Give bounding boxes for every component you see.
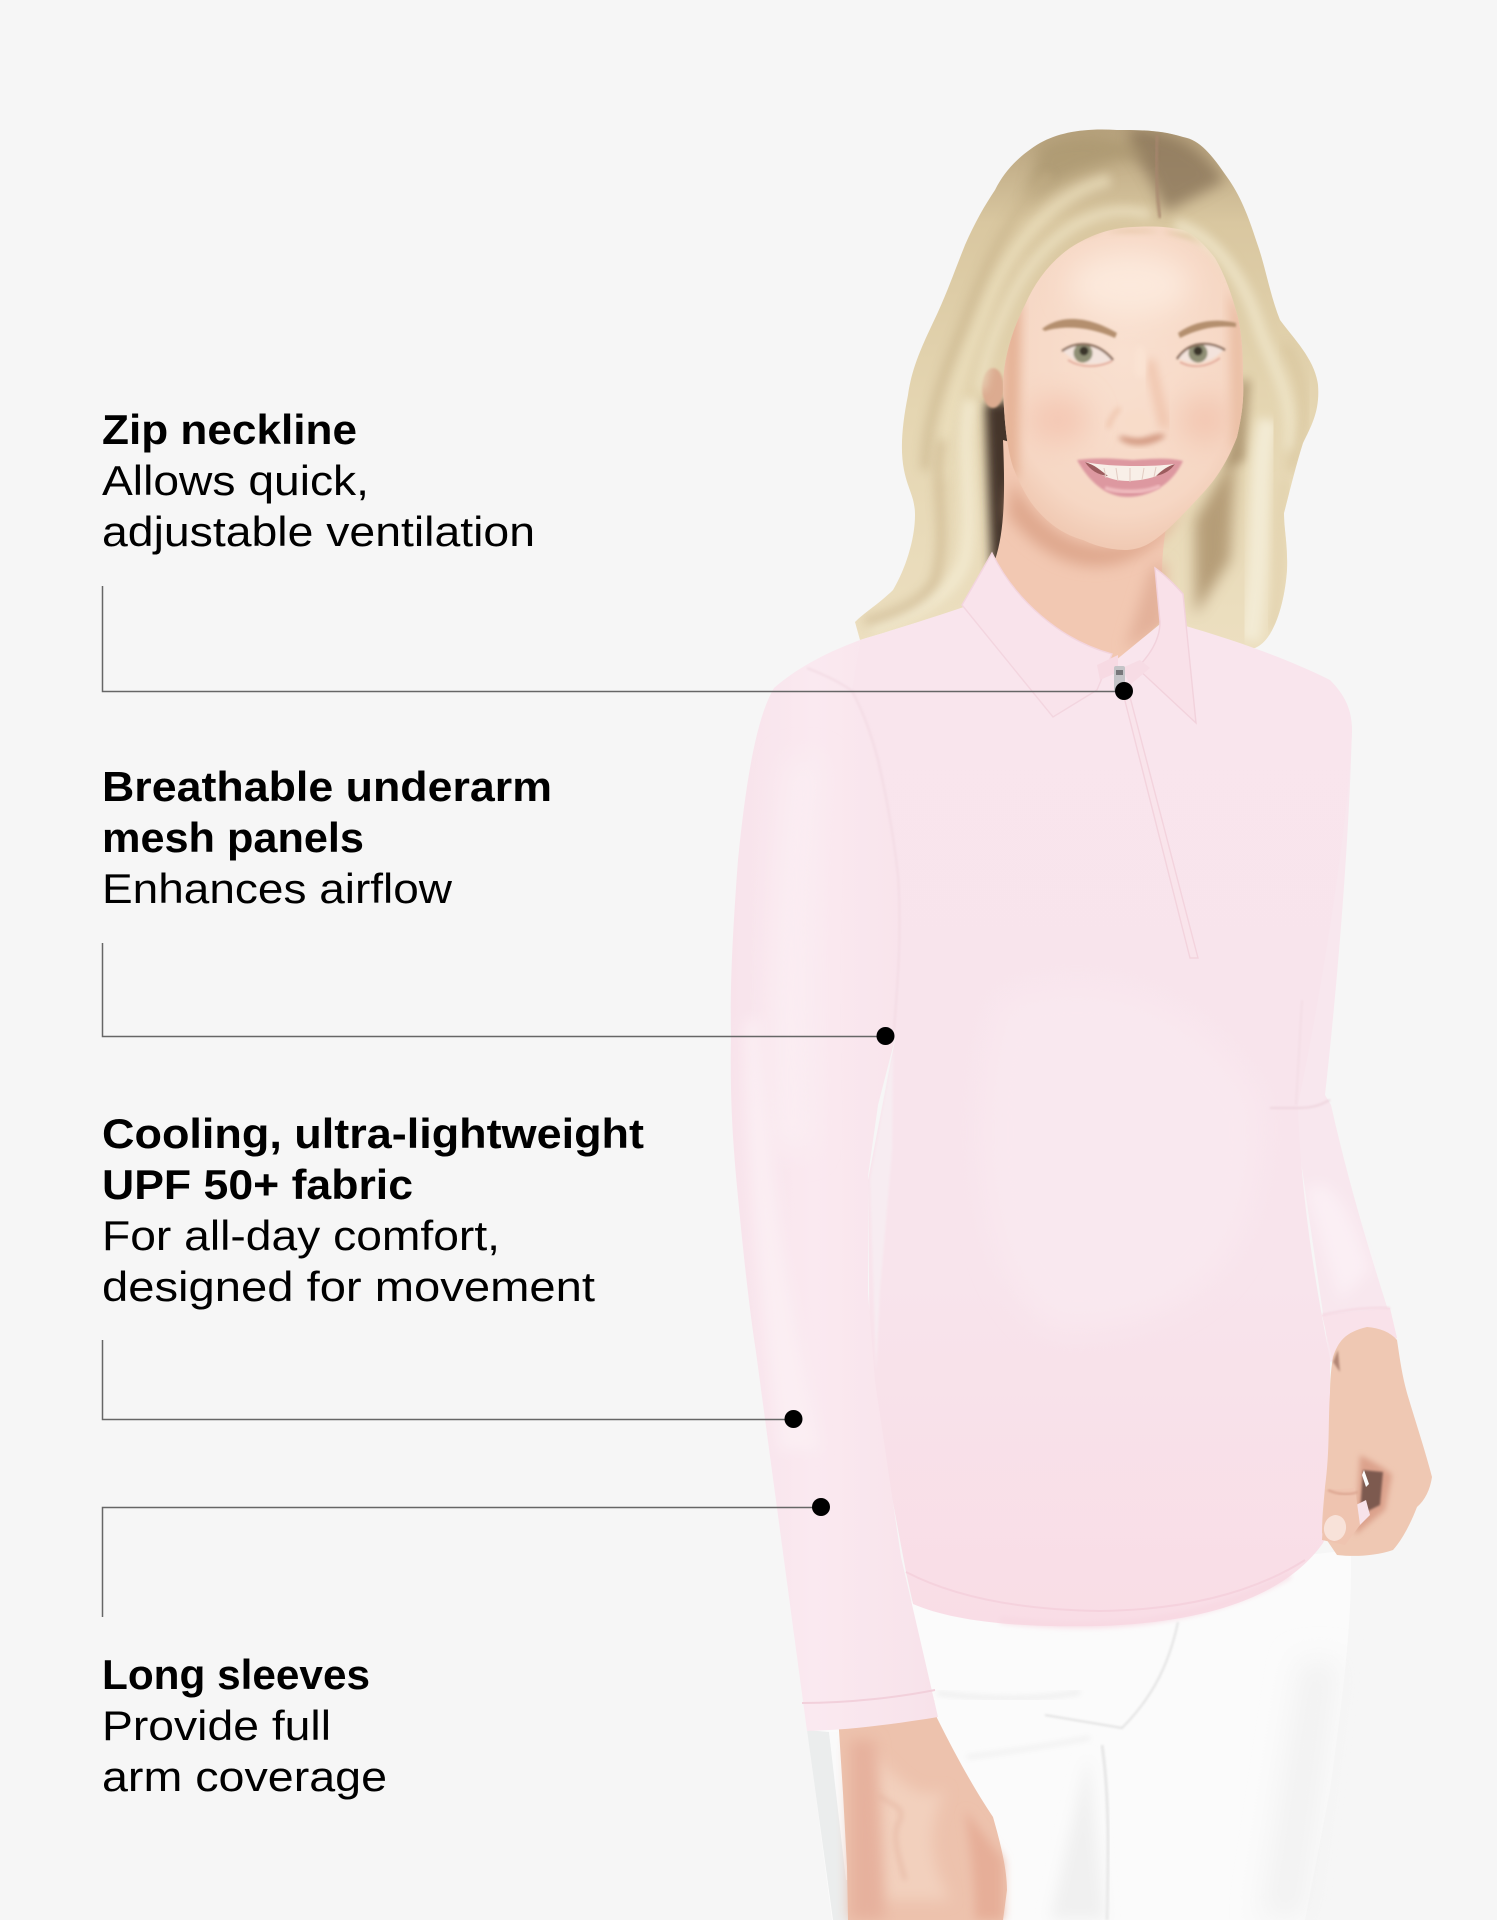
right sleeve <box>1295 725 1397 1362</box>
callout line: underarm mesh <box>102 943 894 1045</box>
text block: breathable underarm mesh panels: mesh panels <box>102 814 364 861</box>
text block: cooling fabric <box>102 1110 644 1310</box>
text block: long sleeves <box>102 1651 387 1800</box>
text block: cooling fabric: For all-day comfort, <box>102 1212 500 1259</box>
text block: zip neckline: Allows quick, <box>102 457 369 504</box>
text block: breathable underarm mesh panels: Enhances airflow <box>102 865 453 912</box>
text block: breathable underarm mesh panels <box>102 763 552 912</box>
dot: fabric <box>784 1410 802 1428</box>
dot: long sleeves <box>812 1498 830 1516</box>
text block: cooling fabric: UPF 50+ fabric <box>102 1161 413 1208</box>
text block: zip neckline: adjustable ventilation <box>102 508 535 555</box>
photo: model wearing pink zip polo <box>731 128 1432 1920</box>
dot: zip neckline <box>1115 682 1133 700</box>
hair front strands <box>865 128 1304 640</box>
heading: zip neckline: Zip neckline <box>102 406 357 453</box>
callout line: zip neckline <box>102 586 1133 700</box>
left hand <box>838 1700 1007 1920</box>
callout line: long sleeves <box>102 1498 830 1617</box>
dot: underarm mesh <box>876 1027 894 1045</box>
heading: cooling fabric: Cooling, ultra-lightweight <box>102 1110 644 1157</box>
eyebrows <box>1042 319 1236 338</box>
collar <box>962 553 1196 723</box>
eyes <box>1062 344 1225 366</box>
nose <box>1108 346 1166 445</box>
heading: breathable underarm mesh panels: Breathable underarm <box>102 763 552 810</box>
zipper placket <box>1124 697 1198 958</box>
text block: long sleeves: Provide full <box>102 1702 331 1749</box>
white pants <box>807 1550 1351 1920</box>
callout line: fabric <box>102 1340 802 1428</box>
text block: long sleeves: arm coverage <box>102 1753 387 1800</box>
text block: zip neckline <box>102 406 535 555</box>
neck <box>995 440 1185 668</box>
zipper pull <box>1114 666 1125 692</box>
shirt body <box>850 598 1352 1626</box>
left sleeve <box>731 640 938 1731</box>
mouth <box>1077 458 1183 497</box>
text block: cooling fabric: designed for movement <box>102 1263 595 1310</box>
face <box>982 226 1248 550</box>
hair back <box>855 130 1318 648</box>
right hand <box>1322 1327 1432 1556</box>
heading: long sleeves: Long sleeves <box>102 1651 370 1698</box>
